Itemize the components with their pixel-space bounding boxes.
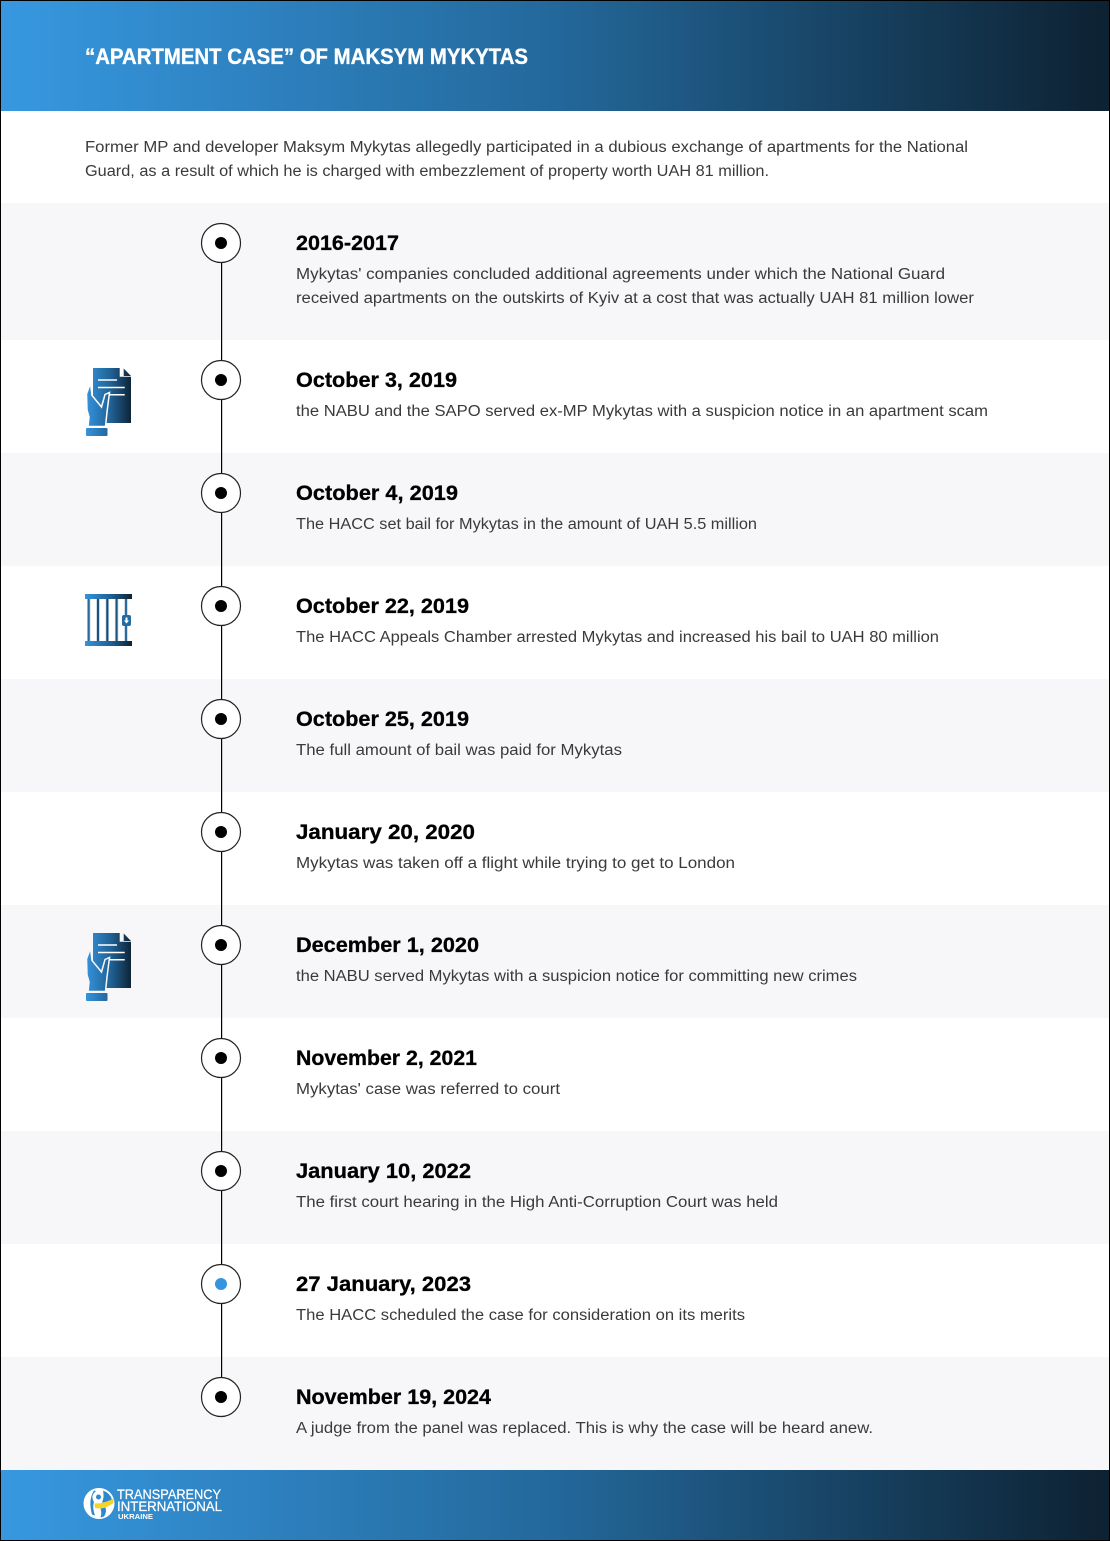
event December 1, 2020: the NABU served Mykytas with a suspicion notice for committing new crimes	[296, 968, 857, 985]
event October 25, 2019: The full amount of bail was paid for Mykytas	[296, 742, 622, 759]
header banner	[0, 0, 1110, 111]
event January 10, 2022: The first court hearing in the High Anti-Corruption Court was held	[296, 1194, 778, 1211]
footer banner	[0, 1470, 1110, 1540]
event November 19, 2024: A judge from the panel was replaced. This is why the case will be heard anew.	[296, 1420, 873, 1437]
intro text	[85, 139, 968, 180]
event November 2, 2021: Mykytas' case was referred to court	[296, 1081, 561, 1098]
event October 22, 2019: October 22, 2019	[296, 594, 469, 618]
event January 20, 2020: January 20, 2020	[296, 820, 475, 844]
event January 10, 2022: January 10, 2022	[296, 1159, 471, 1183]
event October 3, 2019: October 3, 2019	[296, 368, 457, 392]
logo wordmark: INTERNATIONAL	[117, 1498, 222, 1514]
logo wordmark: UKRAINE	[118, 1514, 153, 1521]
event October 22, 2019	[296, 594, 939, 646]
icon: Transparency International logo	[84, 1488, 114, 1519]
event 2016-2017: received apartments on the outskirts of Kyiv at a cost that was actually UAH 81 million lower	[296, 290, 974, 307]
timeline node January 10, 2022	[202, 1152, 240, 1190]
intro text: Guard, as a result of which he is charged with embezzlement of property worth UAH 81 million.	[85, 163, 769, 180]
event January 10, 2022	[296, 1159, 778, 1211]
timeline node October 3, 2019	[202, 360, 240, 400]
logo wordmark	[117, 1486, 222, 1521]
timeline node January 20, 2020	[202, 812, 240, 852]
event 2016-2017	[296, 231, 974, 307]
timeline node December 1, 2020	[202, 926, 240, 964]
event 27 January, 2023: The HACC scheduled the case for consideration on its merits	[296, 1307, 745, 1324]
event 2016-2017: Mykytas' companies concluded additional agreements under which the National Guard	[296, 266, 945, 283]
icon: hand holding document	[86, 368, 131, 436]
event October 4, 2019: The HACC set bail for Mykytas in the amount of UAH 5.5 million	[296, 516, 757, 533]
event November 2, 2021	[296, 1046, 561, 1098]
event January 20, 2020	[296, 820, 735, 872]
event October 3, 2019	[296, 368, 988, 420]
icon: prison bars	[85, 594, 132, 646]
event December 1, 2020: December 1, 2020	[296, 933, 479, 957]
event October 25, 2019: October 25, 2019	[296, 707, 469, 731]
icon: hand holding document	[86, 933, 131, 1001]
timeline node November 19, 2024	[202, 1378, 240, 1416]
event October 4, 2019: October 4, 2019	[296, 481, 458, 505]
event October 4, 2019	[296, 481, 757, 533]
event November 2, 2021: November 2, 2021	[296, 1046, 477, 1070]
timeline node November 2, 2021	[202, 1038, 240, 1078]
event January 20, 2020: Mykytas was taken off a flight while trying to get to London	[296, 855, 735, 872]
timeline node 2016-2017	[202, 224, 240, 262]
event 27 January, 2023: 27 January, 2023	[296, 1272, 471, 1296]
event 27 January, 2023	[296, 1272, 745, 1324]
event 2016-2017: 2016-2017	[296, 231, 399, 255]
event November 19, 2024	[296, 1385, 873, 1437]
event December 1, 2020	[296, 933, 857, 985]
timeline node October 22, 2019	[202, 586, 240, 626]
event October 3, 2019: the NABU and the SAPO served ex-MP Mykytas with a suspicion notice in an apartment scam	[296, 403, 988, 420]
timeline node 27 January, 2023 (highlighted)	[202, 1264, 240, 1304]
event October 25, 2019	[296, 707, 622, 759]
logo wordmark: TRANSPARENCY	[117, 1486, 222, 1502]
timeline node October 25, 2019	[202, 700, 240, 738]
timeline line	[221, 243, 222, 1397]
event October 22, 2019: The HACC Appeals Chamber arrested Mykytas and increased his bail to UAH 80 million	[296, 629, 939, 646]
title: “APARTMENT CASE” OF MAKSYM MYKYTAS	[85, 44, 528, 69]
intro text: Former MP and developer Maksym Mykytas allegedly participated in a dubious exchange of apartments for the National	[85, 139, 968, 156]
event November 19, 2024: November 19, 2024	[296, 1385, 491, 1409]
timeline node October 4, 2019	[202, 474, 240, 512]
